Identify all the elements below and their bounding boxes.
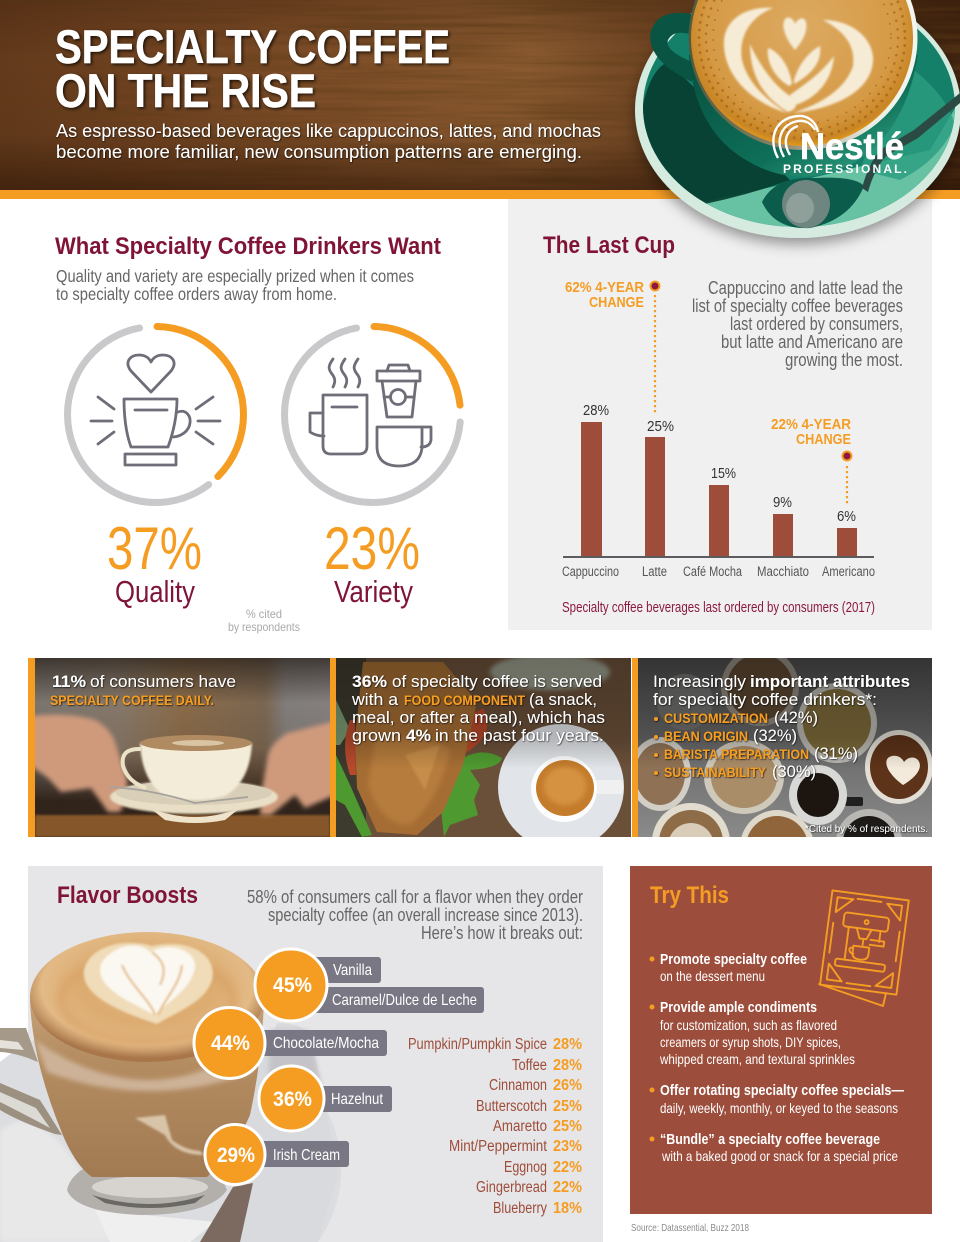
photo panel: daily coffee (28, 658, 335, 837)
spoon (200, 1183, 253, 1242)
text: 11% of consumers (50, 672, 236, 708)
icon: espresso machine menu (819, 890, 909, 1006)
heading: try this: Try This (650, 882, 729, 909)
badge: 29% (205, 1124, 265, 1184)
tips list: Promote specialty coffee (660, 951, 807, 968)
text: 36% of specialty coffee: 36% (352, 672, 387, 691)
text: important attributes: BEAN ORIGIN (664, 728, 748, 744)
text: 36% of specialty coffee: in the past four years. (435, 726, 604, 745)
category labels: Macchiato (757, 564, 809, 579)
sandwich bread (355, 662, 477, 835)
callout: latte 62% change: CHANGE (589, 294, 644, 311)
subtitle: become more familiar, new consumption patterns are emerging. (56, 142, 582, 162)
flavor list: Eggnog (504, 1159, 547, 1176)
text: important attributes: Increasingly (653, 672, 747, 691)
cup body (689, 55, 918, 176)
source note: Source: Datassential, Buzz 2018 (631, 1222, 749, 1234)
tips list: with a baked good or snack for a special price (661, 1148, 898, 1164)
flavor list: Pumpkin/Pumpkin Spice (408, 1036, 547, 1053)
category labels (562, 564, 875, 579)
donut: variety 23% (284, 326, 460, 502)
crema bubbles (699, 0, 905, 138)
pill: hazelnut: Hazelnut (331, 1091, 383, 1108)
pill: caramel (300, 987, 484, 1013)
photo panel: attributes (632, 658, 932, 837)
value labels (583, 403, 856, 525)
flavor list: Mint/Peppermint (449, 1138, 548, 1155)
tips list: Offer rotating specialty coffee specials— (660, 1082, 904, 1099)
crema (691, 0, 913, 146)
pill: vanilla (300, 957, 381, 983)
table (35, 815, 330, 837)
flavor list: 28% (553, 1057, 582, 1074)
saucer (153, 810, 238, 823)
flavor pills (240, 957, 484, 1167)
value labels: 28% (583, 403, 609, 419)
note: % cited (228, 607, 300, 634)
text: 11% of consumers: of consumers have (90, 672, 236, 691)
subtitle (56, 121, 601, 162)
value labels: 9% (773, 495, 792, 511)
text: flavor description: Here’s how it breaks out: (421, 923, 583, 943)
orange stripe (0, 190, 960, 199)
flavor list: Blueberry (493, 1200, 547, 1217)
tips list: daily, weekly, monthly, or keyed to the seasons (660, 1100, 898, 1116)
logo: Nestle Professional: PROFESSIONAL. (783, 162, 907, 176)
text: last cup description (692, 278, 903, 370)
spoon (762, 93, 960, 228)
text: 36% of specialty coffee (351, 672, 605, 745)
latte art (724, 8, 873, 113)
flavor list: 18% (553, 1200, 582, 1217)
chart caption: Specialty coffee beverages last ordered by consumers (2017) (562, 600, 875, 616)
cup (140, 743, 252, 800)
badge: 36% (259, 1066, 324, 1131)
flavor list: Cinnamon (489, 1077, 547, 1094)
stat: 37% quality: 37% (107, 515, 202, 582)
bars (581, 422, 857, 557)
photo panel: food component (330, 654, 631, 850)
badge: 36%: 36% (273, 1088, 312, 1111)
bar chart (562, 403, 875, 579)
text: 36% of specialty coffee: grown (352, 726, 401, 745)
pill: chocolate: Chocolate/Mocha (273, 1035, 379, 1052)
pill: chocolate (240, 1030, 387, 1056)
text: 36% of specialty coffee: of specialty coffee is served (392, 672, 602, 691)
text: important attributes: (31%) (814, 744, 858, 763)
photo: green cappuccino cup (635, 0, 960, 240)
cup handle (0, 1028, 38, 1062)
category labels: Café Mocha (683, 564, 742, 579)
stat: 23% variety: 23% (324, 515, 420, 582)
value labels: 15% (711, 466, 736, 482)
panel: try this (630, 866, 932, 1214)
intro text: to specialty coffee orders away from home. (56, 284, 337, 304)
text: last cup description: last ordered by consumers, (730, 314, 903, 334)
badge: 44% (194, 1008, 265, 1078)
title: ON THE RISE (55, 64, 316, 117)
text: 11% of consumers: SPECIALTY COFFEE DAILY. (50, 692, 214, 708)
title (55, 20, 450, 117)
tips list: Provide ample condiments (660, 999, 817, 1016)
text: important attributes: (32%) (753, 726, 797, 745)
wood background (0, 0, 960, 190)
flavor list: 28% (553, 1036, 582, 1053)
text: important attributes: SUSTAINABILITY (664, 764, 767, 780)
stat: 23% variety (324, 515, 420, 609)
pill: caramel: Caramel/Dulce de Leche (332, 992, 477, 1009)
callout: americano 22% change: 22% 4-YEAR (771, 416, 851, 433)
text: 36% of specialty coffee: FOOD COMPONENT (404, 692, 525, 708)
text: important attributes: (30%) (772, 762, 816, 781)
stat: 37% quality (107, 515, 202, 609)
stat: 23% variety: Variety (334, 574, 413, 609)
donut: quality 37% (68, 326, 244, 502)
axis (563, 556, 874, 558)
tomato (345, 720, 356, 775)
note: % cited: % cited (246, 607, 282, 621)
text: important attributes: (42%) (774, 708, 818, 727)
tips list: on the dessert menu (660, 968, 765, 984)
text: important attributes: BARISTA PREPARATION (664, 746, 809, 762)
photo: latte in glass cup (0, 932, 341, 1242)
pill: irish cream (240, 1141, 349, 1167)
text: 36% of specialty coffee: (a snack, (529, 690, 597, 709)
badge: 29%: 29% (217, 1144, 255, 1167)
flavor list: Toffee (512, 1057, 547, 1074)
text: flavor description: 58% of consumers call for a flavor when they order (247, 887, 583, 907)
badge: 45% (255, 949, 327, 1021)
coffee cups from above (638, 658, 932, 837)
text: 36% of specialty coffee: 4% (406, 726, 431, 745)
pill: hazelnut (300, 1086, 392, 1112)
glass body (30, 1000, 264, 1177)
header banner (0, 0, 960, 199)
logo: Nestle Professional: Nestlé (800, 126, 904, 167)
text: important attributes: important attributes (750, 672, 910, 691)
text: important attributes: CUSTOMIZATION (664, 710, 768, 726)
note: % cited: by respondents (228, 620, 300, 634)
saucer (0, 1040, 342, 1242)
pill: irish cream: Irish Cream (273, 1147, 340, 1164)
foliage (490, 654, 610, 690)
spoon (110, 787, 248, 803)
tips list: creamers or syrup shots, DIY spices, (660, 1034, 841, 1050)
tips list: whipped cream, and textural sprinkles (659, 1051, 855, 1067)
value labels: 25% (647, 419, 674, 435)
callout: latte 62% change (565, 279, 660, 413)
flavor list: Gingerbread (476, 1179, 547, 1196)
heading: what specialty coffee drinkers want: What Specialty Coffee Drinkers Want (55, 233, 441, 260)
flavor list: 26% (553, 1077, 582, 1094)
text: last cup description: list of specialty coffee beverages (692, 296, 903, 316)
text: flavor description: specialty coffee (an overall increase since 2013). (268, 905, 583, 925)
tips list: “Bundle” a specialty coffee beverage (660, 1131, 880, 1148)
icon: cup with heart (91, 355, 220, 465)
subtitle: As espresso-based beverages like cappuccinos, lattes, and mochas (56, 121, 601, 141)
flavor list: 23% (553, 1138, 582, 1155)
flavor list (408, 1036, 582, 1217)
value labels: 6% (837, 509, 856, 525)
text: 36% of specialty coffee: meal, or after a meal), which has (352, 708, 605, 727)
title: SPECIALTY COFFEE (55, 20, 450, 73)
category labels: Latte (642, 564, 667, 579)
callout: americano 22% change: CHANGE (796, 431, 851, 448)
panel: the last cup background (508, 199, 932, 630)
badge: 45%: 45% (273, 974, 312, 997)
tips list: for customization, such as flavored (660, 1017, 837, 1033)
lettuce (336, 755, 372, 837)
flavor list: Amaretto (493, 1118, 547, 1135)
text: 11% of consumers: 11% (52, 672, 86, 691)
heading: the last cup: The Last Cup (543, 232, 675, 259)
callout: americano 22% change (771, 416, 852, 504)
text: 36% of specialty coffee: with a (351, 690, 399, 709)
saucer (635, 0, 960, 240)
logo: Nestle Professional (773, 116, 907, 176)
glass foot (67, 1165, 227, 1215)
crema (30, 932, 264, 1062)
flavor list: 25% (553, 1098, 582, 1115)
text: flavor description (247, 887, 583, 943)
text: last cup description: Cappuccino and latte lead the (708, 278, 903, 298)
callout: latte 62% change: 62% 4-YEAR (565, 279, 644, 296)
text: important attributes: *Cited by % of respondents. (805, 823, 928, 835)
heading: flavor boosts: Flavor Boosts (57, 882, 198, 909)
text: last cup description: growing the most. (785, 350, 903, 370)
category labels: Cappuccino (562, 564, 619, 579)
flavor list: 22% (553, 1159, 582, 1176)
text: important attributes: for specialty coffee drinkers*: (653, 690, 877, 709)
flavor list: 22% (553, 1179, 582, 1196)
nest mark (773, 116, 818, 158)
pill: vanilla: Vanilla (333, 962, 372, 979)
latte art (84, 943, 213, 1024)
tips list (650, 951, 904, 1164)
cup handle (650, 13, 696, 82)
intro text: Quality and variety are especially prized when it comes (56, 266, 414, 286)
panel: flavor boosts background (28, 866, 603, 1242)
stat: 37% quality: Quality (115, 574, 195, 609)
saucer and cup (498, 724, 624, 837)
flavor list: Butterscotch (476, 1098, 547, 1115)
intro text (56, 266, 414, 304)
badge: 44%: 44% (211, 1032, 250, 1055)
text: important attributes (653, 672, 928, 835)
hands (30, 715, 335, 815)
flavor list: 25% (553, 1118, 582, 1135)
text: last cup description: but latte and Americano are (721, 332, 903, 352)
category labels: Americano (822, 564, 875, 579)
icon: three coffee vessels (310, 359, 431, 466)
